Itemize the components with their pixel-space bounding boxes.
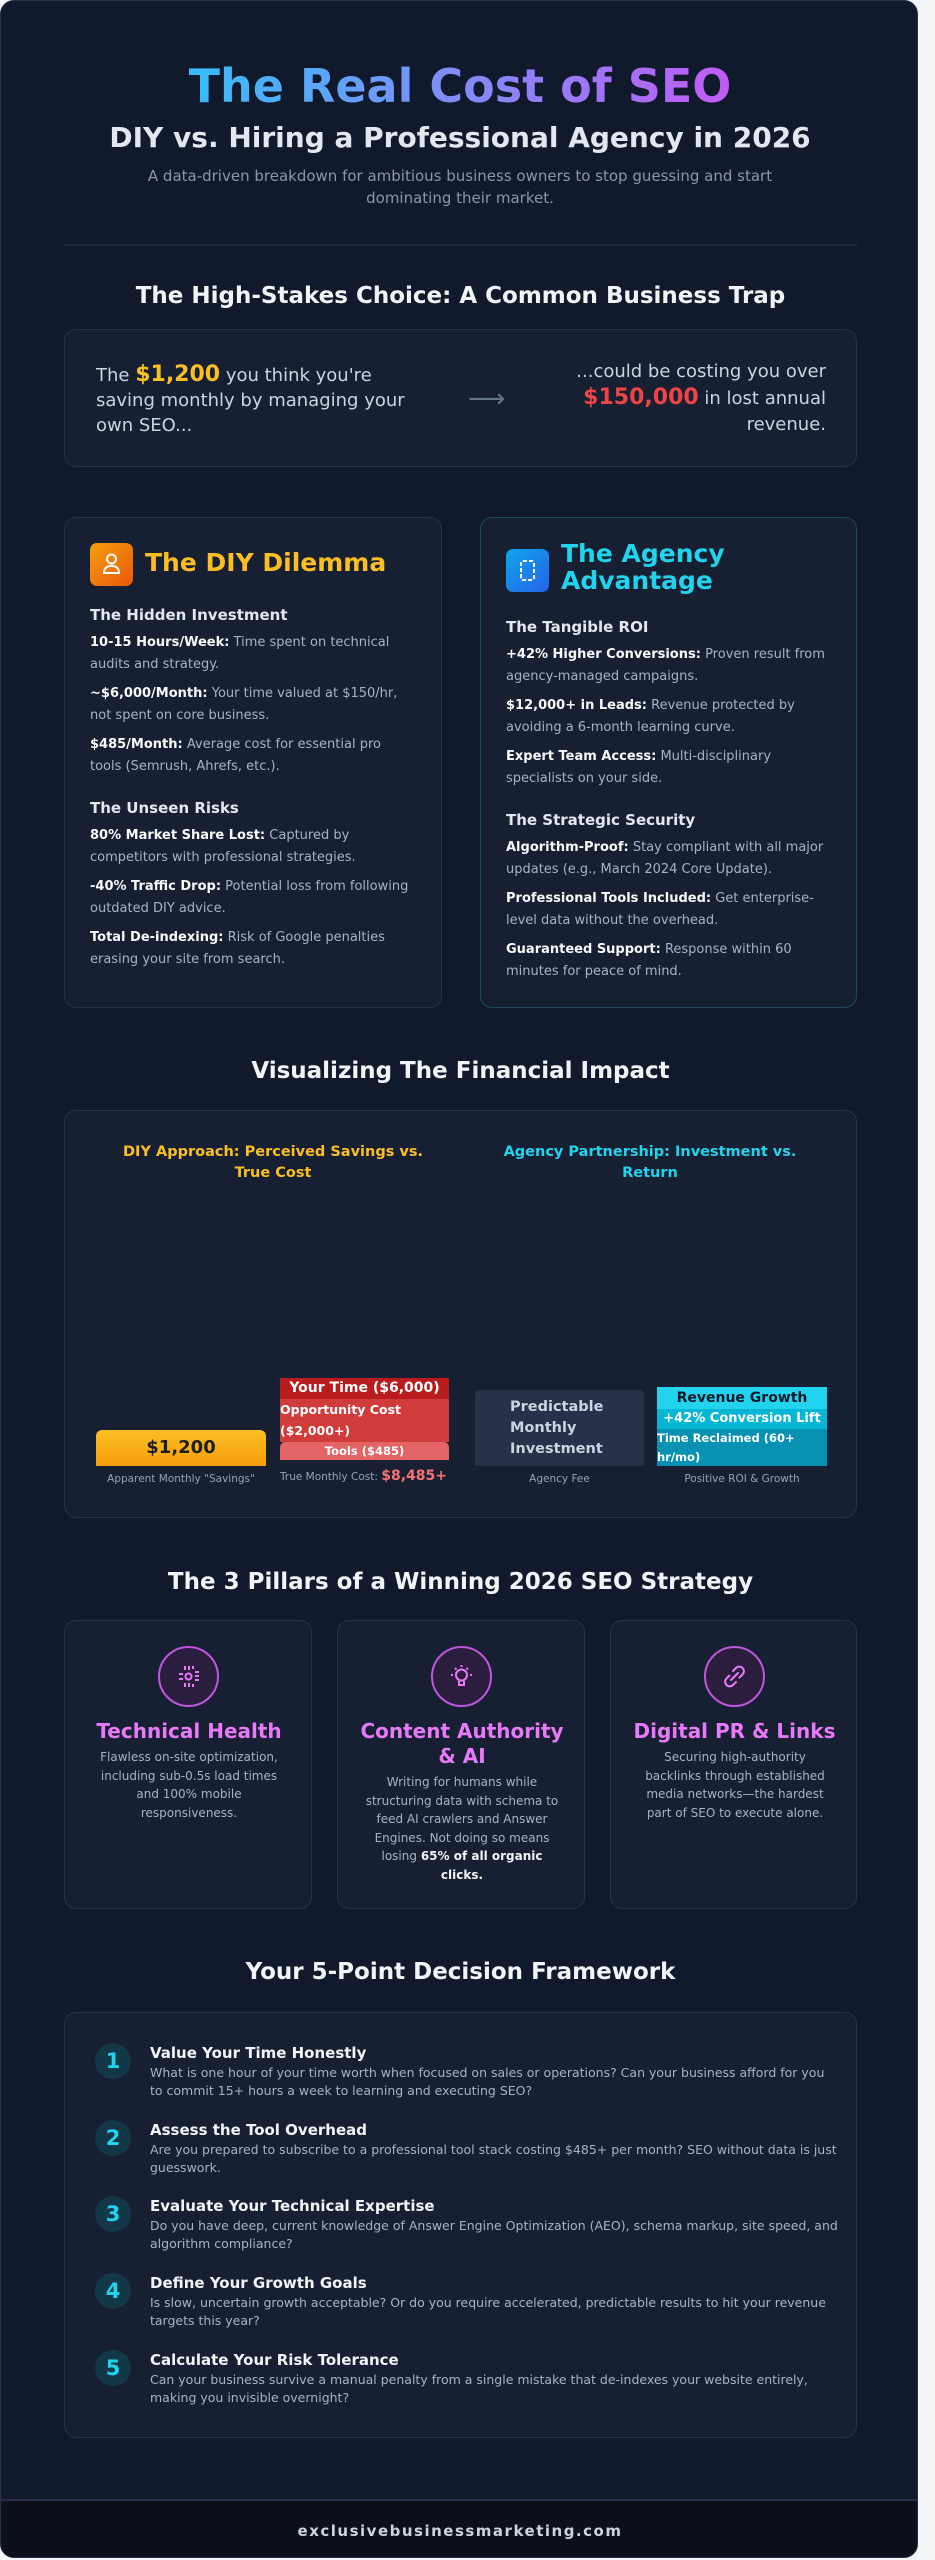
- panel: bar chart: True Monthly Cost: $8,485+: [280, 1468, 447, 1484]
- description: A data-driven breakdown for ambitious business owners to stop guessing and start dominating their market.: [148, 167, 772, 207]
- panel: digital PR: Securing high-authority backlinks through established media networks—the hardest part of SEO to execute alone.: [645, 1750, 825, 1820]
- panel: digital PR: Digital PR & Links: [634, 1719, 835, 1743]
- arrow: ⟶: [468, 384, 505, 414]
- item 1: What is one hour of your time worth when focused on sales or operations? Can your business afford for you to commit 15+ hours a week to learning and executing SEO?: [150, 2065, 824, 2098]
- item 4: 4: [106, 2279, 120, 2303]
- icon: chip: [158, 1646, 219, 1707]
- bar: growth stack: +42% Conversion Lift: [663, 1411, 821, 1426]
- bar: growth stack: Revenue Growth: [677, 1390, 807, 1406]
- item 1: Value Your Time Honestly: [150, 2044, 366, 2062]
- panel: technical health: [64, 1620, 312, 1909]
- panel: technical health: Technical Health: [96, 1719, 282, 1743]
- item 2: [95, 2120, 837, 2175]
- bar: true cost stack: Tools ($485): [325, 1444, 404, 1458]
- text block: hidden investment: [90, 606, 397, 774]
- footer: exclusivebusinessmarketing.com: [298, 2522, 622, 2540]
- heading: 3 pillars: The 3 Pillars of a Winning 2026 SEO Strategy: [168, 1569, 753, 1595]
- text block: hidden investment: The Hidden Investment: [90, 606, 288, 624]
- item 4: Is slow, uncertain growth acceptable? Or do you require accelerated, predictable results to hit your revenue targets this year?: [150, 2295, 826, 2328]
- item 3: [95, 2196, 838, 2251]
- text block: unseen risks: -40% Traffic Drop: Potential loss from following outdated DIY advice.: [90, 879, 408, 916]
- icon: person: [90, 543, 133, 586]
- panel: content authority: [337, 1620, 585, 1909]
- text block: unseen risks: 80% Market Share Lost: Captured by competitors with professional strategies.: [90, 828, 356, 864]
- item 4: [95, 2273, 826, 2328]
- item 2: Assess the Tool Overhead: [150, 2121, 367, 2139]
- text block: strategic security: Professional Tools Included: Get enterprise-level data without the overhead.: [506, 891, 814, 928]
- text: left savings: The $1,200 you think you're saving monthly by managing your own SEO...: [96, 362, 405, 436]
- icon: link: [704, 1646, 765, 1707]
- text: right cost: ...could be costing you over $150,000 in lost annual revenue.: [576, 361, 826, 435]
- heading: [561, 539, 725, 595]
- text block: strategic security: [506, 811, 824, 978]
- bar: true cost stack: Opportunity Cost ($2,000+): [280, 1402, 401, 1438]
- chart title: agency: Agency Partnership: Investment vs. Return: [504, 1144, 796, 1181]
- text block: hidden investment: ~$6,000/Month: Your time valued at $150/hr, not spent on core business.: [90, 686, 397, 722]
- heading: financial impact: Visualizing The Financial Impact: [251, 1058, 670, 1084]
- bar: true cost stack: [280, 1378, 449, 1460]
- panel: content authority: Content Authority: [360, 1719, 564, 1743]
- panel: content authority: Writing for humans while structuring data with schema to feed AI crawlers and Answer Engines. Not doing so means losing 65% of all organic clicks.: [366, 1775, 558, 1882]
- panel: technical health: Flawless on-site optimization, including sub-0.5s load times and 100% mobile responsiveness.: [100, 1750, 278, 1820]
- bar: agency fee: Predictable Monthly Investment: [510, 1399, 603, 1457]
- heading: The Agency: [561, 539, 725, 568]
- item 3: 3: [106, 2202, 120, 2226]
- icon: blueprint: [506, 549, 549, 592]
- item 1: 1: [106, 2049, 120, 2073]
- bar: agency fee: [475, 1390, 644, 1466]
- text block: tangible ROI: [506, 618, 825, 786]
- heading: Advantage: [561, 566, 713, 595]
- panel: DIY dilemma: [64, 517, 442, 1008]
- panel: trap comparison: [64, 329, 857, 467]
- text block: strategic security: Guaranteed Support: Response within 60 minutes for peace of mind.: [506, 942, 792, 978]
- panel: agency advantage: [480, 517, 857, 1008]
- bar: apparent savings: [96, 1430, 266, 1466]
- item 3: Evaluate Your Technical Expertise: [150, 2197, 435, 2215]
- text block: strategic security: Algorithm-Proof: Stay compliant with all major updates (e.g., March 2024 Core Update).: [506, 840, 823, 876]
- subtitle: DIY vs. Hiring a Professional Agency in 2026: [109, 121, 811, 154]
- text block: hidden investment: $485/Month: Average cost for essential pro tools (Semrush, Ahrefs, etc.).: [90, 737, 381, 774]
- text block: unseen risks: [90, 799, 408, 966]
- text block: hidden investment: 10-15 Hours/Week: Time spent on technical audits and strategy.: [90, 635, 389, 672]
- labels: Apparent Monthly "Savings": [107, 1473, 255, 1485]
- bar: apparent savings: $1,200: [146, 1437, 216, 1458]
- icon: lightbulb: [431, 1646, 492, 1707]
- text block: tangible ROI: +42% Higher Conversions: Proven result from agency-managed campaigns.: [506, 647, 825, 684]
- bar: growth stack: Time Reclaimed (60+ hr/mo): [657, 1431, 795, 1464]
- heading: high-stakes choice: The High-Stakes Choice: A Common Business Trap: [136, 283, 785, 309]
- heading: The DIY Dilemma: [145, 548, 386, 577]
- item 1: [95, 2043, 824, 2098]
- bar: true cost stack: Your Time ($6,000): [289, 1380, 440, 1396]
- item 3: Do you have deep, current knowledge of Answer Engine Optimization (AEO), schema markup, site speed, and algorithm compliance?: [150, 2218, 838, 2251]
- item 2: Are you prepared to subscribe to a professional tool stack costing $485+ per month? SEO without data is just guesswork.: [150, 2142, 837, 2175]
- heading: decision framework: Your 5-Point Decision Framework: [246, 1959, 675, 1985]
- panel: bar chart: Agency Fee: [529, 1473, 590, 1485]
- text block: unseen risks: Total De-indexing: Risk of Google penalties erasing your site from search.: [90, 930, 385, 966]
- panel: framework list: [64, 2012, 857, 2438]
- item 4: Define Your Growth Goals: [150, 2274, 367, 2292]
- text block: tangible ROI: Expert Team Access: Multi-disciplinary specialists on your side.: [506, 749, 771, 786]
- text block: unseen risks: The Unseen Risks: [90, 799, 239, 817]
- item 2: 2: [106, 2126, 120, 2150]
- title: The Real Cost of SEO: [189, 59, 731, 113]
- item 5: Can your business survive a manual penalty from a single mistake that de-indexes your website entirely, making you invisible overnight?: [150, 2372, 808, 2405]
- text block: tangible ROI: $12,000+ in Leads: Revenue protected by avoiding a 6-month learning curve.: [506, 698, 795, 734]
- footer: [1, 2499, 919, 2560]
- panel: digital PR: [610, 1620, 857, 1909]
- panel: bar chart: Positive ROI & Growth: [684, 1473, 800, 1485]
- item 5: Calculate Your Risk Tolerance: [150, 2351, 399, 2369]
- item 5: [95, 2350, 808, 2405]
- bar: growth stack: [657, 1387, 827, 1466]
- text block: strategic security: The Strategic Security: [506, 811, 695, 829]
- item 5: 5: [106, 2356, 120, 2380]
- chart title: DIY: DIY Approach: Perceived Savings vs. True Cost: [123, 1144, 423, 1181]
- panel: bar chart: [64, 1110, 857, 1518]
- text block: tangible ROI: The Tangible ROI: [506, 618, 648, 636]
- panel: content authority: & AI: [438, 1744, 486, 1768]
